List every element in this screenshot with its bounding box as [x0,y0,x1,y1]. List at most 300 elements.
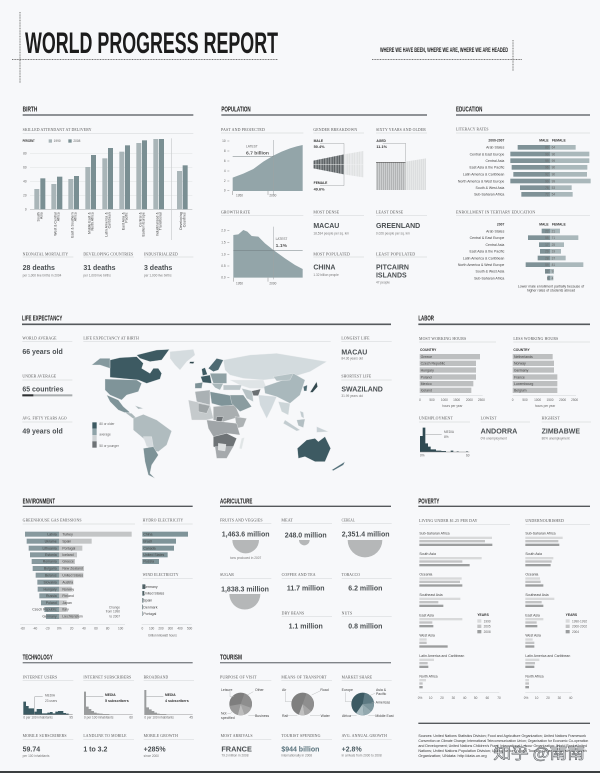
bar chart: most working hours: 1000 [441,398,448,402]
histogram: unemployment: 8% [444,435,449,439]
bar chart: living under $1.25 per day: 2005 [484,625,491,629]
diverging bars: enrollment in tertiary education: MALE [539,222,549,226]
diverging bars: literacy rates: 96 [552,152,555,156]
bar chart: wind electricity: 400 [177,626,183,630]
map legend [92,422,119,448]
diverging bars: enrollment in tertiary education: 4 [552,276,554,280]
pie chart: purpose of visit: PURPOSE OF VISIT [220,676,257,680]
bar chart: undernourished: 30 [558,696,561,700]
stat: most arrivals: FRANCE [221,744,252,753]
pie chart: market share: Middle East [375,714,394,718]
pie chart: purpose of visit: Other [255,688,265,692]
heading: education: EDUCATION [456,107,482,114]
diverging bars: greenhouse gas emissions: -20 [45,626,50,630]
diverging bars: literacy rates: 99 [545,152,549,156]
area chart: past and projected: 6 [224,159,226,163]
stat: lowest unemployment: 0% unemployment [481,437,507,441]
stat: least populated: PITCAIRN [376,265,409,272]
panel: agriculture [220,499,392,631]
histogram: broadband: 45 [189,715,193,719]
map legend: 80 or older [99,422,114,426]
stat: lowest unemployment [481,417,530,441]
sources text: Organization; UNdata: http://data.un.org [418,754,487,758]
bar chart: most working hours: Mexico [421,382,432,386]
stat: meat [281,519,332,545]
bar chart: skilled attendant at delivery: Pacific [125,212,129,223]
stat: average annual growth: AVG. ANNUAL GROWTH [342,734,387,738]
title: WORLD PROGRESS REPORT [25,27,278,60]
bar chart: skilled attendant at delivery: 2008 [73,139,81,143]
bar chart: least working hours: Norway [514,362,526,366]
diverging bars: enrollment in tertiary education: 20 [545,250,549,254]
bar chart: skilled attendant at delivery: Countries [182,212,186,227]
diverging bars: enrollment in tertiary education: 22 [545,229,549,233]
diverging bars: greenhouse gas emissions: GREENHOUSE GAS EMISSIONS [23,519,82,523]
heading: birth: BIRTH [23,107,37,114]
bar chart: most working hours: 0 [419,398,421,402]
chart: gender breakdown [313,128,364,191]
chart: sixty years and older: AGED [376,139,387,143]
stat: cereal: 2,351.4 million [342,531,390,538]
stat: world average [22,337,72,356]
stat: under average: UNDER AVERAGE [22,375,57,379]
bar chart: undernourished: 0% [524,696,528,700]
pie chart: market share: Pacific [376,692,387,696]
bar chart: most working hours: hours per year [442,404,463,408]
diverging bars: enrollment in tertiary education: 37 [552,256,555,260]
bar chart: living under $1.25 per day: LIVING UNDER $1.25 PER DAY [419,519,478,523]
bar chart: wind electricity: 500 [187,626,193,630]
bar chart: hydro electricity [142,519,193,564]
stat: industrialized: per 1,000 live births [144,273,172,277]
diverging bars: literacy rates: South & West Asia [476,186,504,190]
sources text: Sources: United Nations Statistics Division; Food and Agriculture Organization; United Nations Framework [418,734,586,738]
bar chart: living under $1.25 per day: Oceania [419,573,432,577]
diverging bars: literacy rates: North America & West Europe [458,179,504,183]
histogram: broadband: BROADBAND [144,676,169,680]
bar chart: most working hours: Greece [421,355,432,359]
stat: most dense: MOST DENSE [313,211,340,215]
chart: gender breakdown: MALE [314,139,324,143]
diverging bars: literacy rates: FEMALE [552,139,566,143]
stat: most dense: 18,534 people per sq. km [313,232,349,236]
stat: under average: 65 countries [22,387,64,394]
diverging bars: greenhouse gas emissions: New Zealand [62,567,83,571]
pie chart: market share: MARKET SHARE [342,676,373,680]
bar chart: skilled attendant at delivery: 40 [23,179,27,183]
bar chart: most working hours: COUNTRY [420,348,437,352]
diverging bars: greenhouse gas emissions: 0% [57,626,62,630]
bar chart: skilled attendant at delivery: Middle East & [87,212,91,234]
stat: most arrivals: 79.3 million in 2008 [221,754,249,758]
bar chart: hydro electricity: China [143,532,152,536]
bar chart: most working hours: Czech Republic [421,362,445,366]
stat: nuts: NUTS [342,611,352,615]
diverging bars: greenhouse gas emissions: 100 [118,626,124,630]
map legend: average [99,433,111,437]
stat: cereal: CEREAL [342,519,356,523]
diverging bars: greenhouse gas emissions: Turkey [62,532,73,536]
bar chart: least working hours: Luxembourg [514,382,533,386]
diverging bars: greenhouse gas emissions: Poland [46,601,57,605]
bar chart: undernourished: 10 [535,696,539,700]
chart: gender breakdown: FEMALE [314,181,328,185]
stat: average annual growth [342,734,392,758]
stat: world average: 66 years old [22,349,63,356]
bar chart: hydro electricity: Russia [143,560,154,564]
diverging bars: greenhouse gas emissions: Liechtenstein [62,615,83,619]
stat: longest life: LONGEST LIFE [341,337,370,341]
bar chart: undernourished: 20 [546,696,550,700]
diverging bars: enrollment in tertiary education: 55 [545,236,549,240]
bar chart: skilled attendant at delivery: Africa [57,212,61,221]
stat: shortest life: SHORTEST LIFE [341,375,372,379]
bar chart: skilled attendant at delivery: 1990 [54,139,61,143]
area chart: growth rate [221,211,303,285]
diverging bars: enrollment in tertiary education: Latin America & Caribbean [463,256,504,260]
stat: nuts: 0.8 million [348,624,382,631]
diverging bars: literacy rates: 90 [552,173,555,177]
diverging bars: greenhouse gas emissions: Germany [42,615,57,619]
diverging bars: literacy rates: 99 [545,179,549,183]
stat: developing countries: per 1,000 live births [83,273,111,277]
stat: mobile subscribers: per 100 inhabitants [23,754,50,758]
panel: life expectancy [22,316,392,478]
bar chart: undernourished: Oceania [525,573,538,577]
panel: technology [23,655,194,758]
diverging bars: enrollment in tertiary education: 9 [552,270,554,274]
stat: industrialized: 3 deaths [144,265,172,272]
panel: poverty [418,499,590,764]
panel: population [221,107,427,285]
bar chart: living under $1.25 per day: East Asia [419,613,434,617]
stat: mobile growth: +285% [144,746,166,753]
histogram: internet subscribers: 5 subscribers [105,699,129,703]
stat: mobile growth: MOBILE GROWTH [144,734,178,738]
diverging bars: literacy rates: 2000-2007 [488,139,504,143]
stat: sugar: SUGAR [220,573,234,577]
pie chart: market share [342,676,394,718]
bar chart: most working hours: 1500 [453,398,460,402]
pie chart: market share: Europe [342,688,353,692]
area chart: growth rate: 0.5 [221,264,226,268]
area chart: growth rate: 2000 [269,281,277,285]
histogram: internet subscribers: 0 per 100 inhabitants [84,715,114,719]
diverging bars: enrollment in tertiary education: FEMALE [552,222,566,226]
bar chart: skilled attendant at delivery: East Asia & [121,212,125,230]
tagline: WHERE WE HAVE BEEN, WHERE WE ARE, WHERE WE ARE HEADED [380,48,508,54]
bar chart: living under $1.25 per day: 70 [497,696,501,700]
pie chart: means of transport: Air [282,688,287,692]
bar chart: wind electricity: 0 [141,626,143,630]
sources text: Convention on Climate Change; International Telecommunication Union; Organisation for Economic Co-operation [418,739,588,743]
diverging bars: greenhouse gas emissions: Italy [62,608,69,612]
heading: tourism: TOURISM [220,655,242,662]
area chart: growth rate: LATEST [276,237,287,241]
stat: neonatal mortality: 28 deaths [23,265,55,272]
diverging bars: literacy rates: LITERACY RATES [456,128,489,132]
bar chart: least working hours: Belgium [514,389,527,393]
diverging bars: greenhouse gas emissions: United States [62,573,84,577]
diverging bars: greenhouse gas emissions: Czech Republic [32,608,57,612]
bar chart: skilled attendant at delivery: Asia [40,212,44,219]
stat: most dense [313,211,364,236]
diverging bars: enrollment in tertiary education: Arab States [486,229,505,233]
diverging bars: greenhouse gas emissions: Greece [62,560,74,564]
stat: average annual growth: +2.8% [342,746,362,753]
stat: most arrivals: MOST ARRIVALS [221,734,253,738]
diverging bars: enrollment in tertiary education: Central Asia [486,243,504,247]
stat: highest unemployment: ZIMBABWE [542,429,580,436]
area chart: past and projected: 0 [224,188,226,192]
stat: developing countries [83,252,134,277]
bar chart: hydro electricity: United States [143,553,165,557]
diverging bars: literacy rates: 90 [552,166,555,170]
chart: gender breakdown: 50.4% [314,145,325,149]
bar chart: living under $1.25 per day [418,519,510,700]
stat: least dense: GREENLAND [376,223,420,230]
histogram: internet subscribers: MEDIA [105,693,116,697]
chart: gender breakdown: 49.6% [314,187,325,191]
bar chart: wind electricity: United States [143,592,165,596]
sources text: and Development; United Nations Children's Fund; International Labour Organization; World Bank; United [418,744,587,748]
stat: tobacco: 6.2 million [348,585,382,592]
bar chart: living under $1.25 per day: 40 [463,696,467,700]
histogram: unemployment: 60 [466,454,470,458]
bar chart: undernourished: Southeast Asia [525,593,549,597]
stat: dry beans: DRY BEANS [282,611,304,615]
panel: tourism [220,655,394,758]
stat: industrialized [144,252,193,277]
bar chart: most working hours: Iceland [421,389,432,393]
bar chart: skilled attendant at delivery: East & Southern [70,212,74,238]
area chart: past and projected: 4 [224,169,226,173]
area chart: growth rate: 1950 [236,281,243,285]
bar chart: skilled attendant at delivery: Eastern Europe [142,212,146,237]
pie chart: means of transport: Water [321,714,331,718]
stat: shortest life: SWAZILAND [341,387,383,394]
bar chart: skilled attendant at delivery: 60 [23,165,27,169]
bar chart: undernourished: YEARS [566,613,578,617]
diverging bars: enrollment in tertiary education: Lower male enrollment partially because of [518,285,584,289]
stat: fruits and veggies: 1,463.6 million [222,531,270,538]
area chart: past and projected: 10 [222,139,226,143]
diverging bars: greenhouse gas emissions: Change [109,605,120,609]
header band [12,12,522,83]
stat: fruits and veggies: FRUITS AND VEGGIES [220,519,263,523]
heading: labor: LABOR [418,316,434,323]
area chart: growth rate: 0.0 [221,276,226,280]
area chart: growth rate: 1.1% [276,243,288,249]
diverging bars: enrollment in tertiary education: South & West Asia [476,270,504,274]
stat: dry beans [282,611,332,631]
diverging bars: greenhouse gas emissions: Spain [62,539,71,543]
diverging bars: greenhouse gas emissions: Hungary [43,587,57,591]
stat: longest life [341,337,392,361]
diverging bars: literacy rates: 92 [545,173,549,177]
stat: tourist spending: internationally in 2008 [281,754,312,758]
bar chart: least working hours: 1000 [534,398,541,402]
bar chart: skilled attendant at delivery: South [36,212,40,221]
stat: neonatal mortality: per 1,000 live births in 2004 [23,273,62,277]
bar chart: undernourished: 2000-2002 [572,625,587,629]
bar chart: most working hours [419,337,496,408]
stat: least populated: ISLANDS [376,272,407,279]
pie chart: market share: Asia & [376,688,387,692]
bar chart: least working hours: 0 [512,398,514,402]
diverging bars: greenhouse gas emissions: Portugal [62,546,76,550]
stat: tobacco: TOBACCO [342,573,360,577]
stat: coffee and tea: 11.7 million [287,585,324,592]
bar chart: living under $1.25 per day: Sub-Saharan Africa [419,532,450,536]
diverging bars: enrollment in tertiary education: 12 [545,270,549,274]
stat: fruits and veggies [220,519,271,560]
stat: sugar [220,573,271,609]
diverging bars: greenhouse gas emissions: Austria [62,580,73,584]
pie chart: means of transport [281,676,332,718]
stat: mobile subscribers [23,734,73,758]
stat: fruits and veggies: tons produced in 2007 [230,556,262,560]
diverging bars: enrollment in tertiary education: Central & East Europe [470,236,504,240]
diverging bars: enrollment in tertiary education [456,210,590,293]
panel: birth [23,107,193,277]
area chart: past and projected: 8 [224,149,226,153]
stat: shortest life: 31.99 years old [341,394,363,398]
histogram: internet users: 0 per 100 inhabitants [23,715,53,719]
bar chart: wind electricity: Denmark [143,605,158,609]
bar chart: undernourished: 2004 [572,630,579,634]
bar chart: least working hours: LESS WORKING HOURS [513,337,558,341]
chart: sixty years and older [376,128,427,190]
area chart: growth rate: GROWTH RATE [221,211,251,215]
stat: developing countries: 31 deaths [83,265,116,272]
diverging bars: greenhouse gas emissions: Norway [62,587,74,591]
stat: landline to mobile: LANDLINE TO MOBILE [83,734,127,738]
diverging bars: greenhouse gas emissions: Latvia [47,532,57,536]
pie chart: market share: Africa [342,714,351,718]
diverging bars: greenhouse gas emissions: Belarus [45,573,57,577]
histogram: internet subscribers: 60 [129,715,133,719]
histogram: broadband: 4 subscribers [165,699,189,703]
bar chart: wind electricity: 300 [168,626,173,630]
diverging bars: enrollment in tertiary education: 59 [545,263,549,267]
sources text [418,723,590,758]
stat: cereal [342,519,392,557]
bar chart: hydro electricity: Brazil [143,539,152,543]
stat: longest life: MACAU [341,349,367,356]
stat: most populated: CHINA [313,265,335,272]
stat: meat: 248.0 million [285,532,327,539]
bar chart: undernourished: South Asia [525,552,542,556]
bar chart: most working hours: Hungary [421,368,434,372]
diverging bars: enrollment in tertiary education: higher rates of students abroad [527,289,575,293]
histogram: internet users [23,676,73,719]
bar chart: skilled attendant at delivery: PERCENT [23,139,35,143]
diverging bars: enrollment in tertiary education: 28 [545,256,549,260]
stat: most populated [313,252,364,277]
histogram: internet users: MEDIA [45,694,56,698]
bar chart: most working hours: 2500 [478,398,485,402]
stat: shortest life [341,375,392,398]
stat: most populated: 1.32 billion people [313,273,339,277]
bar chart: least working hours: COUNTRY [513,348,530,352]
diverging bars: literacy rates: 96 [545,166,549,170]
bar chart: undernourished: North Africa [525,674,544,678]
bar chart: living under $1.25 per day: 60 [486,696,489,700]
diverging bars: enrollment in tertiary education: 81 [552,263,555,267]
bar chart: least working hours: 500 [522,398,528,402]
diverging bars: greenhouse gas emissions: Japan [62,601,72,605]
area chart: past and projected: LATEST [246,145,258,149]
diverging bars: enrollment in tertiary education: Sub-Saharan Africa [474,276,504,280]
bar chart: wind electricity: 100 [149,626,155,630]
heading: population: POPULATION [221,107,251,114]
stat: lowest unemployment: LOWEST [481,417,497,421]
pie chart: market share: Americas [376,701,390,705]
bar chart: skilled attendant at delivery: 80 [23,151,27,155]
bar chart: undernourished: 1990-1992 [572,619,587,623]
heading: life expectancy: LIFE EXPECTANCY [22,316,63,323]
stat: most dense: MACAU [313,223,339,230]
stat: dry beans: 1.1 million [289,624,323,631]
diverging bars: enrollment in tertiary education: North America & West Europe [458,263,504,267]
stat: sugar: 1,838.3 million [221,586,269,593]
diverging bars: greenhouse gas emissions: Iceland [62,553,74,557]
stat: coffee and tea [282,573,332,592]
bar chart: skilled attendant at delivery: 20 [23,193,27,197]
chart: sixty years and older: SIXTY YEARS AND OLDER [376,128,426,132]
bar chart: wind electricity: Portugal [143,612,157,616]
bar chart: hydro electricity: Canada [143,546,156,550]
sub-heading: skilled attendant: SKILLED ATTENDANT AT DELIVERY [23,128,92,132]
stat: least populated: LEAST POPULATED [376,252,416,256]
bar chart: least working hours: Germany [514,368,529,372]
diverging bars: enrollment in tertiary education: East Asia & the Pacific [469,250,505,254]
watermark: 知乎 @南南 [493,742,585,764]
stat: least dense: LEAST DENSE [376,211,404,215]
stat: neonatal mortality [23,252,73,277]
world map: life expectancy at birth [83,337,345,478]
bar chart: living under $1.25 per day: 0% [418,696,422,700]
bar chart: undernourished: Latin America and Caribbean [525,654,570,658]
bar chart: undernourished: West Asia [525,634,541,638]
bar chart: wind electricity: Spain [143,599,152,603]
bar chart: living under $1.25 per day: 10 [429,696,433,700]
bar chart: undernourished: UNDERNOURISHED [525,519,564,523]
panel: education [456,107,591,293]
bar chart: least working hours: 2500 [571,398,578,402]
pie chart: means of transport: Rail [282,714,288,718]
stat: mobile subscribers: MOBILE SUBSCRIBERS [23,734,67,738]
bar chart: living under $1.25 per day: North Africa [419,674,438,678]
pie chart: purpose of visit: Business [255,714,269,718]
bar chart: living under $1.25 per day: 20 [440,696,444,700]
diverging bars: literacy rates: 75 [545,186,549,190]
stat: longest life: 84.36 years old [341,357,363,361]
stat: landline to mobile [83,734,134,753]
stat: least populated [376,252,427,284]
stat: tobacco [342,573,392,592]
stat: least populated: 47 people [376,280,390,284]
chart: gender breakdown: GENDER BREAKDOWN [313,128,358,132]
stat: tourist spending: TOURIST SPENDING [281,734,321,738]
diverging bars: greenhouse gas emissions: Ukraine [45,539,57,543]
diverging bars: literacy rates: 80 [545,145,549,149]
pie chart: means of transport: MEANS OF TRANSPORT [281,676,327,680]
diverging bars: greenhouse gas emissions: Finland [62,594,74,598]
heading: agriculture: AGRICULTURE [220,499,253,506]
histogram: unemployment: UNEMPLOYMENT [419,417,454,421]
